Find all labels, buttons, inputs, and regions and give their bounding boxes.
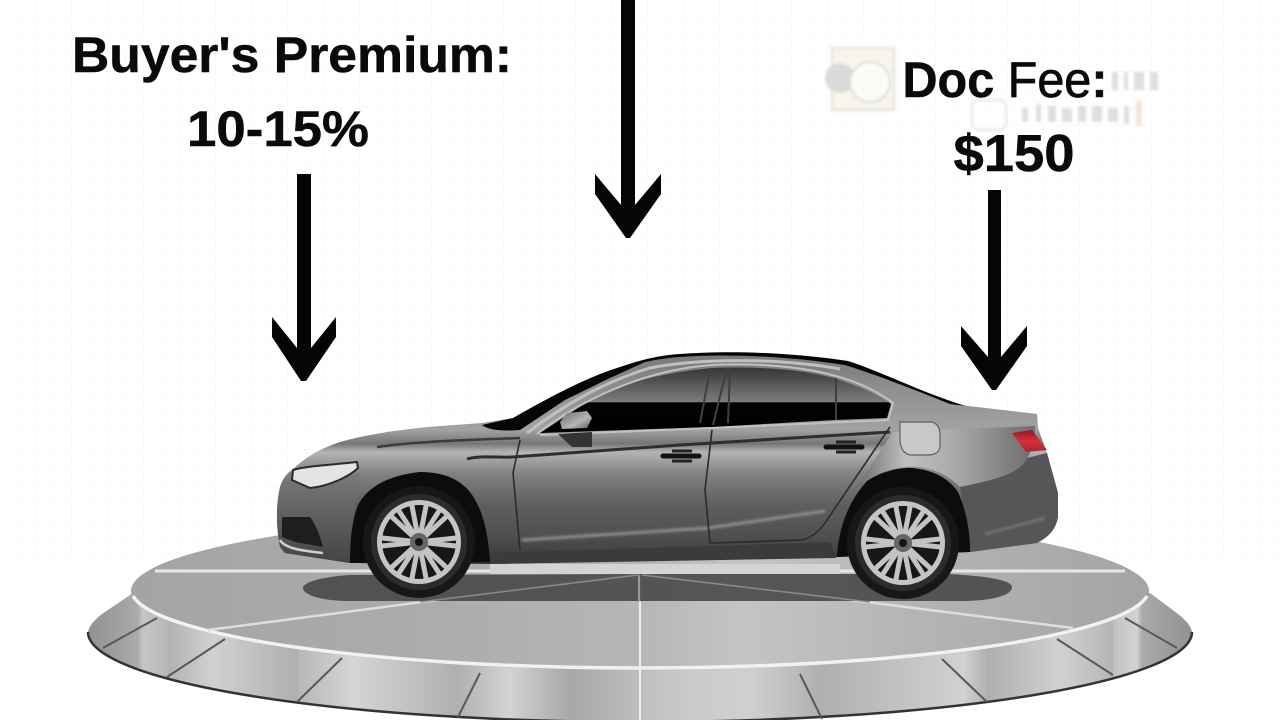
sill <box>490 542 837 564</box>
hood crease <box>377 438 520 447</box>
front wheel arch <box>350 472 490 563</box>
rear quarter panel <box>848 426 1035 500</box>
heading: Doc Fee: Doc Fee: <box>902 52 1108 108</box>
front fender and bumper <box>277 473 360 563</box>
arrow: left, to car front <box>272 174 336 381</box>
soft floor shadow under rim <box>92 640 1188 719</box>
front wheel <box>363 486 475 598</box>
door seams <box>513 427 890 550</box>
car shadow <box>303 574 1012 601</box>
silver roof rail <box>527 361 840 433</box>
value: 10-15%: 10-15% <box>187 101 369 157</box>
roof and windshield black strip <box>482 352 966 430</box>
ghost icon and faded label behind Doc Fee <box>825 48 1158 130</box>
tail light <box>1012 430 1047 452</box>
headlight <box>292 462 358 488</box>
value: $150: $150 <box>954 125 1074 183</box>
door handles <box>663 442 862 461</box>
rear wheel arch <box>837 468 970 557</box>
arrow: centre <box>595 0 661 238</box>
rear wheel <box>847 487 959 599</box>
rear bumper <box>960 453 1058 552</box>
window pillars <box>700 368 836 425</box>
car <box>277 352 1058 599</box>
window chrome trim <box>537 364 893 435</box>
heading: Buyer's Premium: Buyer's Premium: <box>72 27 512 83</box>
arrow: right, to car trunk <box>961 190 1027 390</box>
front grille <box>282 517 323 547</box>
fuel door <box>900 422 940 455</box>
outer bevelled rim <box>88 593 1192 720</box>
turntable platform <box>88 512 1192 720</box>
belt crease <box>467 432 890 459</box>
side windows <box>540 368 891 433</box>
mirror <box>560 411 592 429</box>
platform top surface <box>131 512 1149 670</box>
mirror shadow <box>558 432 592 447</box>
lower door reflection <box>522 511 825 540</box>
car body <box>277 353 1058 564</box>
bumper highlight <box>985 518 1045 534</box>
front bumper lip <box>280 540 323 553</box>
